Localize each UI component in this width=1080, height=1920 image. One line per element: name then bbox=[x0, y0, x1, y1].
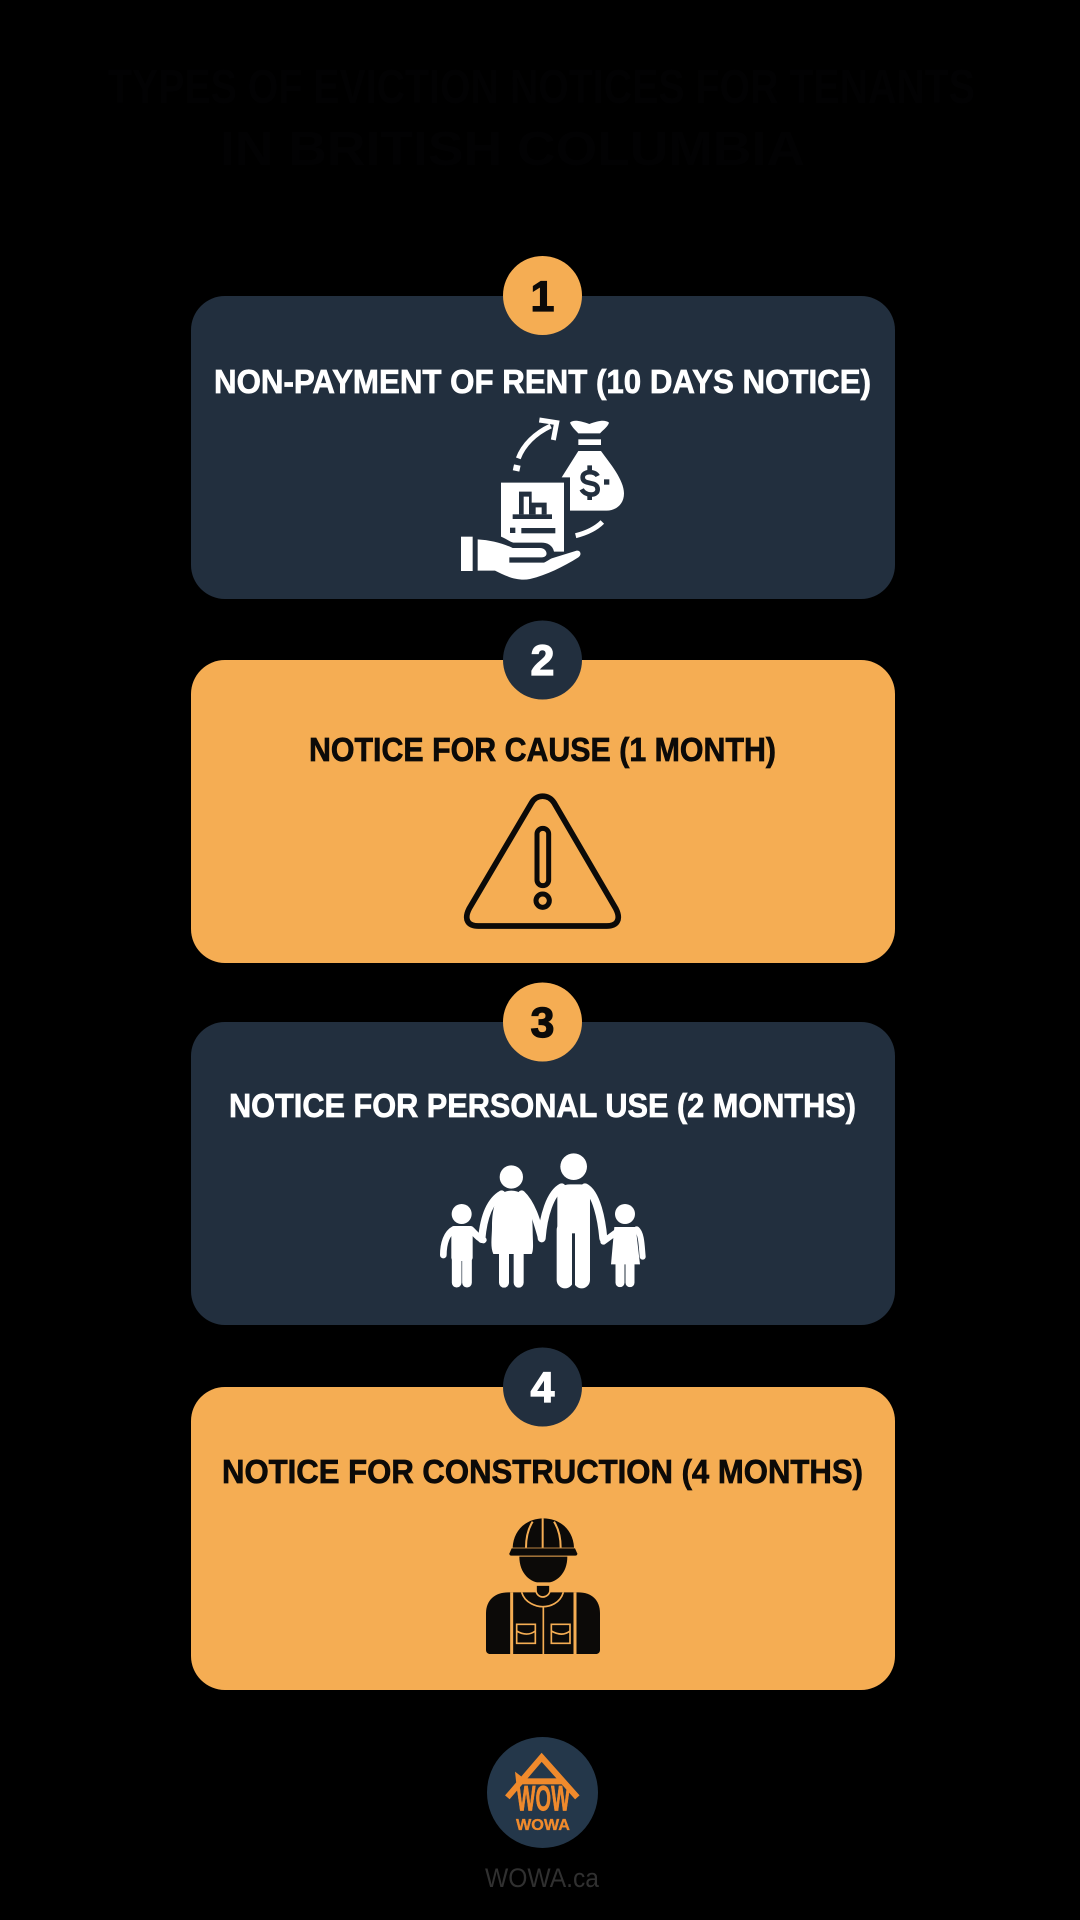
logo caption: WOWA.ca bbox=[485, 1863, 600, 1893]
logo house mark bbox=[507, 1757, 577, 1834]
heading: non-payment of rent: NON-PAYMENT OF RENT (10 DAYS NOTICE) bbox=[214, 363, 871, 400]
panel: notice for cause bbox=[191, 620, 895, 963]
number badge 2 bbox=[503, 620, 582, 700]
heading: notice for cause: NOTICE FOR CAUSE (1 MONTH) bbox=[309, 731, 776, 768]
number badge 4 bbox=[503, 1348, 582, 1426]
panel: notice for personal use bbox=[191, 982, 895, 1325]
heading: notice for construction: NOTICE FOR CONSTRUCTION (4 MONTHS) bbox=[222, 1453, 863, 1490]
icon: warning triangle bbox=[467, 796, 618, 926]
logo house mark: WOWA bbox=[516, 1817, 570, 1834]
icon: family bbox=[443, 1153, 643, 1288]
title bbox=[108, 61, 975, 176]
logo: WOWA bbox=[487, 1737, 598, 1848]
logo house mark: WOW bbox=[517, 1780, 570, 1819]
number badge 3: 3 bbox=[531, 999, 554, 1047]
panel: notice for construction bbox=[191, 1348, 895, 1690]
number badge 3 bbox=[503, 982, 582, 1062]
icon: construction worker bbox=[486, 1518, 600, 1654]
icon: hand with document and money bag bbox=[461, 420, 624, 580]
number badge 1 bbox=[503, 256, 582, 335]
title: IN BRITISH COLUMBIA bbox=[220, 123, 805, 176]
heading: notice for personal use: NOTICE FOR PERSONAL USE (2 MONTHS) bbox=[229, 1087, 856, 1124]
number badge 1: 1 bbox=[531, 273, 554, 321]
number badge 2: 2 bbox=[531, 637, 554, 685]
panel: non-payment of rent bbox=[191, 256, 895, 599]
number badge 4: 4 bbox=[531, 1364, 555, 1412]
